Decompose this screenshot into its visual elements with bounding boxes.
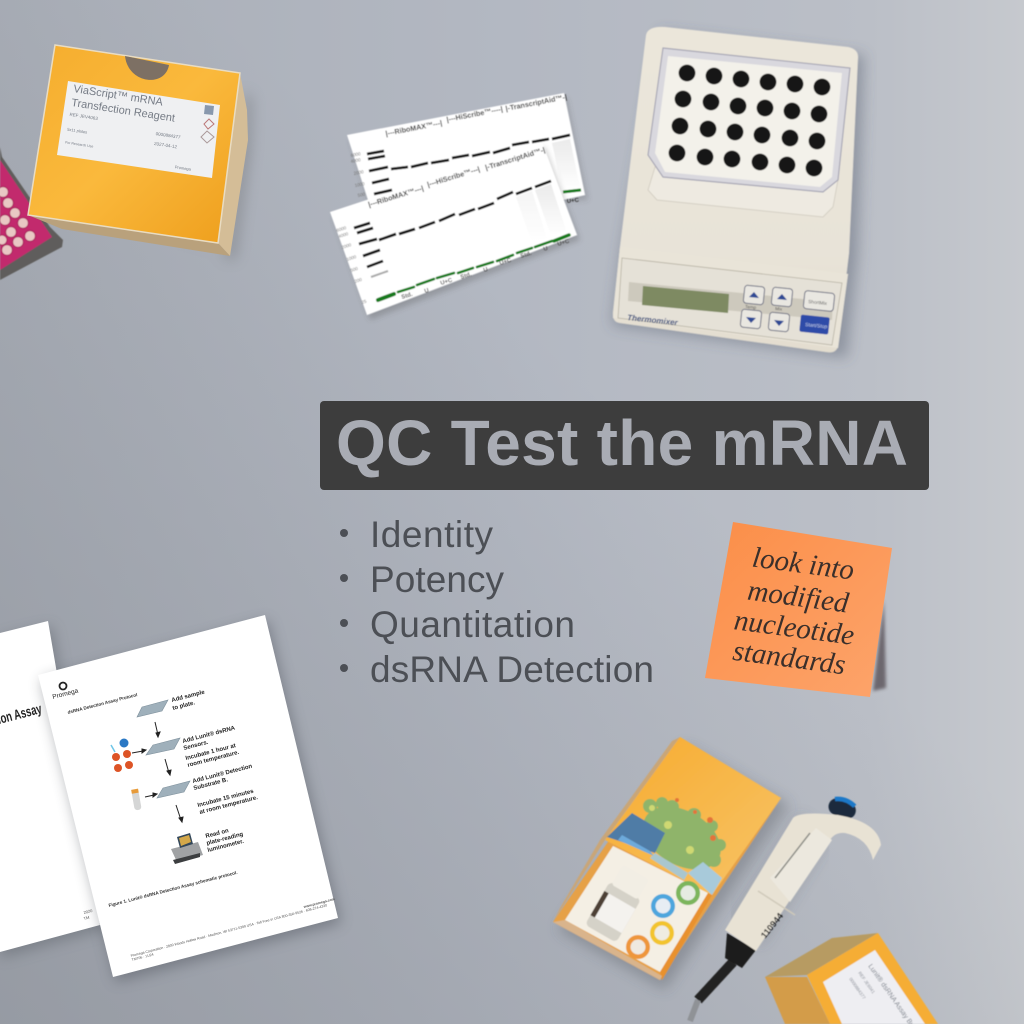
gel sheet: front: Std.: [460, 272, 473, 281]
gel sheet: back: 1000: [354, 181, 366, 188]
gel sheet: back: |---HiScribe™----|: [446, 104, 503, 124]
protocol labels: luminometer.: [207, 839, 245, 854]
product label: [57, 81, 220, 178]
instrument body: [613, 27, 858, 352]
gel electrophoresis sheets: [330, 92, 588, 320]
gel sheet: front: |---HiScribe™---|: [426, 164, 481, 189]
kit shadow: [558, 745, 790, 990]
pink well plate, cropped at left edge: [0, 147, 63, 280]
gel sheet: front: U+C: [499, 257, 513, 267]
protocol labels: Incubate 1 hour at: [185, 743, 237, 762]
footer: Promega Corporation · 2800 Woods Hollow Road · Madison, WI 53711-5399 USA · Toll Free in USA 800-356-9526 · 608-274-4330: [130, 903, 328, 958]
box side: [218, 73, 248, 256]
product label: 5x11 plates: [67, 127, 88, 135]
bullet: identity: Identity: [370, 514, 494, 555]
protocol labels: room temperature.: [187, 750, 240, 769]
gel sheet: front: U+C: [440, 277, 454, 287]
gel sheet: front: 1000: [346, 254, 357, 262]
product label: For Research Use: [65, 140, 94, 149]
gel sheet: front: 500: [350, 266, 359, 273]
gel sheet: front: U+C: [557, 238, 571, 248]
kit outer box: [553, 737, 781, 980]
handwritten note: [731, 542, 856, 681]
sticky note: [705, 522, 892, 697]
gel sheet: front: |-TranscriptAid™-|: [484, 145, 546, 172]
kit artwork: [607, 794, 732, 895]
product label: ViaScript™ mRNA: [73, 83, 164, 109]
gel sheet: front: 4000: [338, 231, 349, 239]
protocol labels: Read on: [205, 828, 230, 840]
pipette button: [826, 795, 858, 821]
gel sheet: back: 2000: [353, 169, 365, 176]
LCD display: [642, 286, 729, 313]
gel sheet: front: 25: [361, 299, 368, 305]
bullet: dsRNA detection: dsRNA Detection: [370, 649, 654, 690]
gel sheet: front: 200: [354, 277, 363, 284]
gel sheet: back: |-TranscriptAid™-|: [505, 92, 568, 113]
product label: Transfection Reagent: [70, 97, 176, 125]
handwritten note: modified: [746, 575, 851, 620]
bullet: potency: Potency: [370, 559, 504, 600]
control panel: [618, 258, 842, 345]
protocol labels: at room temperature.: [199, 795, 259, 816]
volume readout: 110944: [759, 911, 785, 940]
pipette shaft: [698, 962, 733, 1000]
buffer box side: [765, 977, 830, 1024]
protocol labels: Incubate 15 minutes: [197, 789, 255, 809]
box front edge: [28, 215, 230, 256]
control panel: Start/Stop: [805, 322, 828, 330]
protocol plates: [137, 700, 190, 798]
gel sheet: front: U: [483, 267, 489, 274]
gel sheet: front: |---RiboMAX™---|: [367, 183, 425, 209]
pipette: [690, 795, 881, 1021]
product label: 2027-04-12: [154, 141, 178, 149]
buffer box lid: [807, 933, 938, 1024]
document: back page: TM: [83, 915, 90, 921]
gel sheet: back: [347, 92, 588, 210]
ViaScript mRNA box: [28, 45, 252, 260]
clear lid and block: [648, 48, 850, 192]
pipette body: [725, 814, 881, 951]
footer: www.promega.com: [302, 897, 335, 909]
heating block pedestal: [648, 167, 838, 217]
protocol labels: Add Lunit® dsRNA: [182, 724, 237, 745]
lower housing: [613, 247, 848, 348]
gel sheet: front: U: [543, 246, 549, 253]
bullet: quantitation: Quantitation: [370, 604, 575, 645]
reagent tube: [131, 789, 142, 811]
figure caption: Figure 1. Lunit® dsRNA Detection Assay schematic protocol.: [108, 869, 238, 908]
control panel: ShortMix: [808, 299, 828, 307]
handwritten note: look into: [750, 542, 856, 587]
protocol labels: [171, 689, 259, 854]
Lunit dsRNA buffer box: [765, 933, 938, 1024]
gel sheet: front: [330, 142, 580, 320]
gel sheet: front: 6000: [336, 225, 347, 233]
protocol labels: plate-reading: [206, 832, 244, 847]
buffer label: 0000884377: [848, 977, 867, 1000]
handwritten note: nucleotide: [732, 604, 856, 652]
protocol labels: Add Lunit® Detection: [192, 763, 253, 785]
gel sheet: front: Std.: [520, 251, 533, 260]
buffer box top edge: [765, 933, 878, 977]
protocol labels: to plate.: [172, 700, 196, 712]
document: back page: [0, 621, 108, 958]
handwritten note: standards: [731, 635, 847, 681]
instrument shadow: [612, 32, 864, 358]
product label: Promega: [174, 164, 192, 172]
curled corner shadow: [873, 600, 886, 691]
footer: TM706 · 11/24: [131, 952, 154, 962]
buffer label: [823, 950, 925, 1024]
lid notch: [125, 56, 169, 80]
protocol heading: dsRNA Detection Assay Protocol: [67, 692, 138, 715]
gel sheet: front: Std.: [401, 292, 414, 301]
gel sheet: back: U+C: [567, 198, 580, 205]
product label: REF JEV4063: [69, 112, 99, 121]
kit yellow lid: [605, 737, 781, 895]
document: back page: 2020: [83, 908, 94, 915]
plate reader: [171, 833, 203, 864]
Thermomixer instrument: [612, 27, 864, 358]
box gold lid: [28, 45, 240, 243]
gel sheet: back: |---RiboMAX™---|: [385, 118, 443, 138]
pipette shadow: [745, 825, 815, 935]
control buttons: [740, 285, 835, 332]
protocol labels: Substrate B.: [193, 777, 229, 792]
product label: 0000884377: [155, 131, 181, 140]
control panel: Mix: [775, 306, 783, 312]
gel sheet: back: 6000: [350, 151, 362, 158]
reagent bottle: [585, 863, 652, 943]
protocol documents: [0, 615, 341, 982]
gel sheet: back: 500: [357, 192, 366, 198]
kit tray: [565, 846, 708, 972]
sensor illustration: [111, 738, 133, 772]
title banner: QC Test the mRNA: [336, 407, 908, 479]
bullet list: [340, 514, 654, 690]
gel sheet: front: 2000: [341, 242, 352, 250]
protocol arrows: [132, 722, 183, 822]
kit tan side: [553, 737, 680, 922]
box shadow: [40, 90, 252, 260]
tube wells: [669, 65, 830, 176]
control panel: Temp: [745, 304, 757, 310]
document: front page: [38, 615, 341, 982]
brand: Thermomixer: [627, 313, 679, 327]
protocol labels: Sensors.: [183, 740, 209, 752]
protocol labels: Add sample: [171, 689, 206, 704]
Lunit dsRNA assay kit: [553, 737, 790, 990]
gel sheet: front: U: [424, 288, 430, 295]
buffer label: REF JE6041: [857, 971, 876, 995]
colored caps: [626, 881, 700, 959]
promega logo: Promega: [52, 687, 79, 701]
gel sheet: back: 4000: [350, 157, 362, 164]
